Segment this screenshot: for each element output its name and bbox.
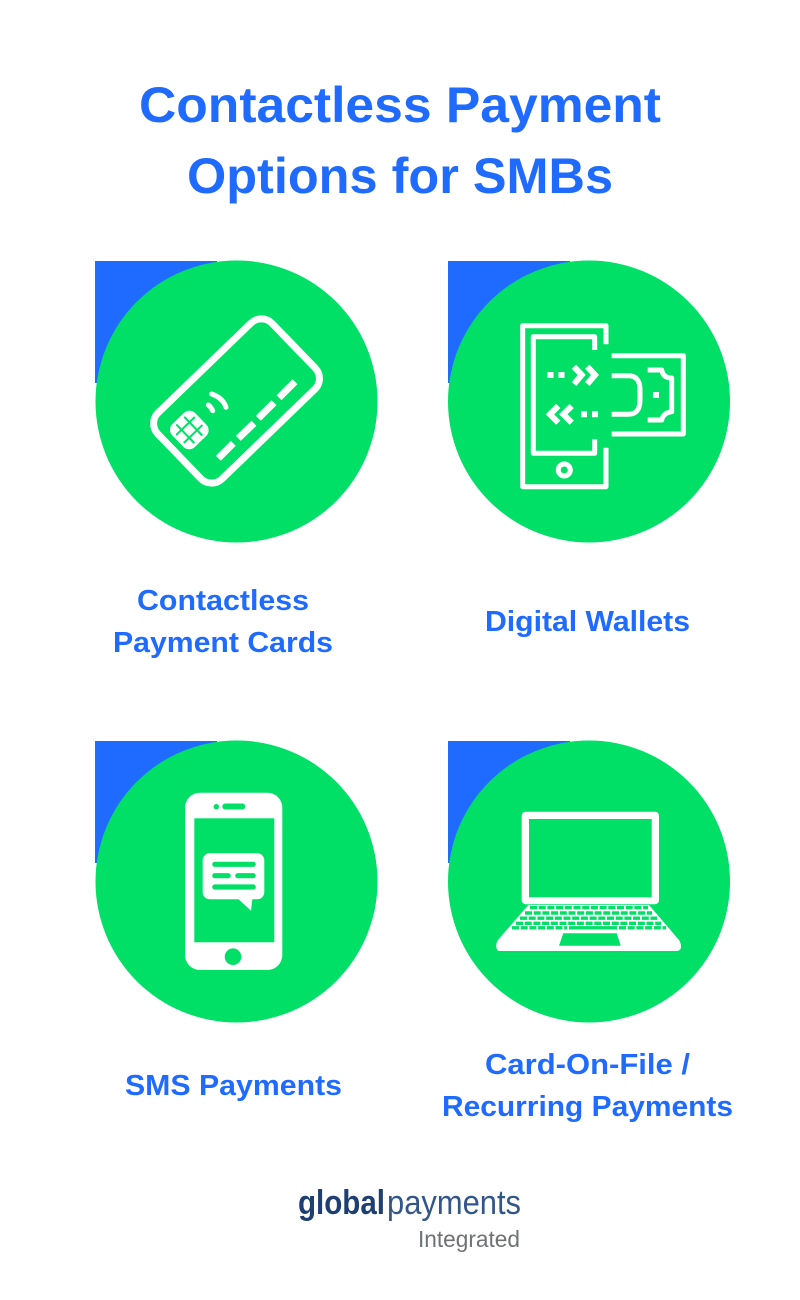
panel: contactless payment cards [95, 260, 378, 659]
logo: global payments integrated: global [298, 1184, 385, 1222]
title [139, 77, 661, 204]
blue corner accent [95, 741, 217, 863]
panel: digital wallets [448, 260, 730, 638]
icon: phone exchanging banknote [523, 326, 683, 487]
icon: contactless card [147, 313, 326, 489]
label: Card-On-File / [485, 1049, 690, 1081]
label: Recurring Payments [442, 1091, 733, 1123]
blue corner accent [95, 261, 217, 383]
blue corner accent [448, 741, 570, 863]
logo: global payments integrated: Integrated [418, 1226, 520, 1252]
label [442, 1049, 733, 1123]
label: Payment Cards [113, 627, 333, 659]
icon: laptop [496, 812, 681, 951]
green circle [96, 740, 378, 1022]
green circle [96, 260, 378, 542]
logo: global payments integrated: payments [387, 1184, 521, 1222]
panel: card-on-file recurring payments [442, 740, 733, 1123]
label [113, 585, 333, 659]
blue corner accent [448, 261, 570, 383]
logo: global payments integrated [298, 1184, 521, 1252]
green circle [448, 260, 730, 542]
label: Digital Wallets [485, 606, 690, 638]
label: SMS Payments [125, 1070, 342, 1102]
label: Contactless [137, 585, 309, 617]
title: Contactless Payment [139, 77, 661, 133]
title: Options for SMBs [187, 148, 613, 204]
icon: phone with chat bubble [185, 793, 282, 970]
green circle [448, 740, 730, 1022]
panel: sms payments [95, 740, 378, 1102]
